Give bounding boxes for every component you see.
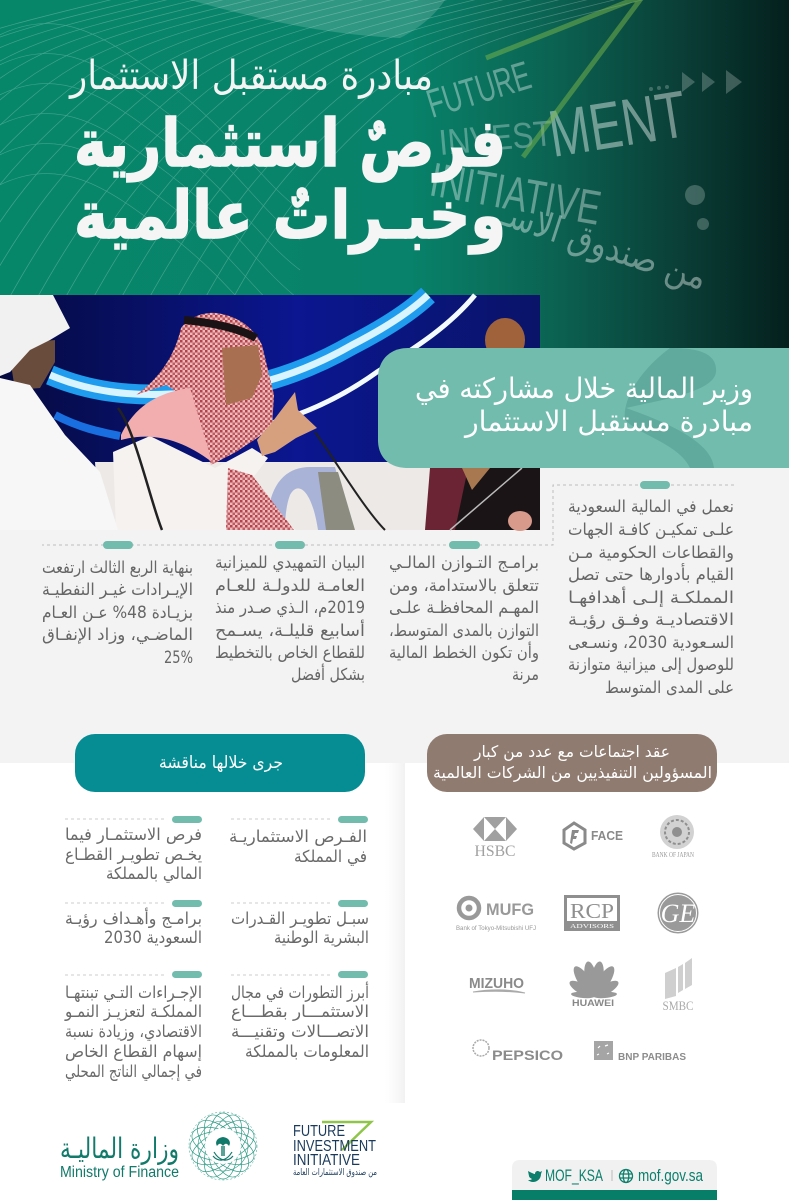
icon: globe xyxy=(620,1170,632,1182)
text columns connector xyxy=(42,485,734,545)
heading: discussion: جرى خلالها مناقشة xyxy=(159,753,283,773)
logo: MUFG xyxy=(456,898,536,932)
panel: column 2: التوازن بالمدى المتوسط، xyxy=(389,621,539,641)
watermark: arrows and nodes xyxy=(649,70,742,230)
panel: column 3: أسابيع قليلـة، يسـمح xyxy=(215,619,365,641)
list item: investment opportunities xyxy=(229,816,368,867)
list item: telecom developments xyxy=(231,971,369,1062)
title: main line 2: وخبـراتٌ عالمية xyxy=(74,177,506,255)
logo: RCP Advisors: RCP xyxy=(570,899,614,923)
photo: minister on stage xyxy=(0,295,540,531)
logo: Huawei xyxy=(567,960,621,1008)
watermark: FII text: MENT xyxy=(544,76,691,171)
microphones xyxy=(118,408,162,530)
logo: Future Investment Initiative xyxy=(293,1122,377,1178)
hero contour lines xyxy=(0,0,662,360)
heading: meetings: المسؤولين التنفيذيين من الشركات العالمية xyxy=(433,763,712,783)
logo: PepsiCo: PEPSICO xyxy=(492,1047,563,1063)
logo: HSBC: HSBC xyxy=(474,843,516,860)
list item: financial sector: المالي بالمملكة xyxy=(106,864,202,884)
list item: growth measures: المملكـة لتعزيـز النمـو xyxy=(64,1002,202,1022)
minister: robe xyxy=(113,436,296,530)
panel: column 2: تتعلق بالاستدامة، ومن xyxy=(389,576,539,596)
list item: financial sector: يخـص تطويـر القطـاع xyxy=(65,845,202,865)
list item: telecom developments: المعلومات بالمملكة xyxy=(245,1042,369,1062)
logo: Bank of Japan: BANK OF JAPAN xyxy=(652,851,694,859)
logo: MUFG: MUFG xyxy=(486,900,534,919)
callout text: وزير المالية خلال مشاركته في xyxy=(415,372,753,405)
logo: GE: GE xyxy=(661,899,695,928)
panel: column 4: الإيـرادات غيـر النفطيـة xyxy=(42,580,193,600)
panel: column 1 xyxy=(568,481,734,698)
panel: column 2: وأن تكون الخطط المالية xyxy=(389,641,539,663)
list item: telecom developments: الاستثمـــار بقطـــاع xyxy=(231,1002,369,1022)
panel: column 1: الاقتصاديـة وفـق رؤيـة xyxy=(568,610,734,630)
list item: growth measures: في إجمالي الناتج المحلي xyxy=(65,1062,202,1082)
list item: financial sector xyxy=(65,816,202,884)
logo: FACE: FACE xyxy=(591,828,623,843)
panel: column 1: السـعودية 2030، ونسـعى xyxy=(568,633,734,653)
watermark: FII text: INVEST xyxy=(437,112,554,163)
panel: hero header xyxy=(0,0,789,360)
panel: column 2: مرنة xyxy=(512,665,539,685)
website: mof.gov.sa xyxy=(638,1166,703,1185)
list item: human capacity: سبـل تطويـر القـدرات xyxy=(231,909,369,929)
minister: headdress xyxy=(136,313,274,465)
icon: ministry emblem xyxy=(187,1110,259,1182)
title: initiative name: مبادرة مستقبل الاستثمار xyxy=(68,53,433,99)
panel: column 3 xyxy=(215,541,365,684)
logo: RCP Advisors: ADVISORS xyxy=(570,924,614,930)
list item: investment opportunities: في المملكة xyxy=(294,847,367,867)
panel: column 3: بشكل أفضل xyxy=(291,663,365,684)
logo: Ministry of Finance wordmark: Ministry of Finance xyxy=(60,1164,179,1181)
watermark: green seven xyxy=(486,0,640,157)
panel: column 1: المملكـة إلـى أهدافهـا xyxy=(568,586,734,608)
watermark: FII text: FUTURE xyxy=(422,54,536,127)
title: main line 1: فرصٌ استثمارية xyxy=(74,105,506,182)
panel: column 3: البيان التمهيدي للميزانية xyxy=(215,553,365,573)
callout: minister caption: مبادرة مستقبل الاستثمار xyxy=(463,405,753,438)
callout: minister caption xyxy=(378,348,789,468)
logo: Ministry of Finance wordmark xyxy=(60,1132,179,1181)
logo: Future Investment Initiative: INVESTMENT xyxy=(293,1138,376,1155)
logo: FACE xyxy=(564,823,623,849)
panel: column 4 xyxy=(42,541,193,667)
panel: column 4: 25% xyxy=(164,648,193,667)
panel: column 2: برامـج التـوازن المالـي xyxy=(389,553,539,573)
marker xyxy=(640,481,670,489)
stage light arcs xyxy=(50,295,428,394)
grey text band xyxy=(0,468,789,763)
light swoosh xyxy=(190,0,445,38)
panel: column 4: بزيـادة 48% عـن العـام xyxy=(42,603,193,623)
list item: telecom developments: الاتصـــالات وتقنيـــة xyxy=(231,1022,369,1042)
marker xyxy=(449,541,480,549)
logo: GE xyxy=(658,892,698,934)
panel: column 3: 2019م، الـذي صـدر منذ xyxy=(215,598,365,618)
logo: BNP Paribas: BNP PARIBAS xyxy=(618,1052,686,1063)
panel: column 1: والقطاعات الحكومية مـن xyxy=(568,543,734,563)
logo: Future Investment Initiative: من صندوق الاستثمارات العامة xyxy=(293,1168,377,1178)
callout watermark shape xyxy=(625,348,716,468)
woman on right xyxy=(485,318,525,362)
minister: raised hand xyxy=(257,392,317,456)
panel: column 4: بنهاية الربع الثالث ارتفعت xyxy=(42,558,193,578)
handle: MOF_KSA xyxy=(545,1166,603,1185)
panel: column 1: للوصول إلى ميزانية متوازنة xyxy=(568,655,734,675)
list item: financial sector: فرص الاستثمـار فيما xyxy=(65,825,202,845)
logo: Huawei: HUAWEI xyxy=(572,998,614,1008)
watermark: FII text xyxy=(422,54,691,236)
list item: investment opportunities: الفـرص الاستثماريـة xyxy=(229,827,367,847)
marker xyxy=(275,541,305,549)
panel: column 3: العامـة للدولـة للعـام xyxy=(215,576,365,596)
podium arch xyxy=(267,467,352,530)
list item: human capacity xyxy=(231,900,369,948)
logo: HSBC xyxy=(473,817,517,860)
left man: gutra and face xyxy=(8,340,55,390)
left man: robe xyxy=(0,378,118,530)
minister: igal xyxy=(184,320,256,338)
list item: growth measures: إسهام القطاع الخاص xyxy=(65,1042,202,1062)
logo: SMBC: SMBC xyxy=(662,998,694,1013)
logo: RCP Advisors xyxy=(564,895,620,931)
panel: column 4: الماضـي، وزاد الإنفـاق xyxy=(42,625,193,645)
logo: PepsiCo xyxy=(473,1040,563,1063)
list item: vision 2030: السعودية 2030 xyxy=(104,928,202,948)
panel: column 1: نعمل في المالية السعودية xyxy=(568,497,734,517)
vertical panel shadow xyxy=(385,763,405,1103)
panel: column 2: المهـم المحافظـة علـى xyxy=(389,598,539,618)
panel: column 1: القيام بأدوارها حتى تصل xyxy=(568,563,734,585)
watermark: FII text: INITIATIVE xyxy=(426,154,605,236)
list item: telecom developments: أبرز التطورات في مجال xyxy=(231,981,369,1003)
list item: growth measures: الإجـراءات التـي تبنتهـا xyxy=(65,983,202,1003)
panel: column 3: للقطاع الخاص بالتخطيط xyxy=(215,643,365,663)
minister: pink stripe xyxy=(121,388,212,462)
logo: BNP Paribas xyxy=(594,1041,686,1063)
logo: Future Investment Initiative: FUTURE xyxy=(293,1123,345,1140)
list item: human capacity: البشرية الوطنية xyxy=(274,928,369,948)
list item: vision 2030: برامـج وأهـداف رؤيـة xyxy=(65,907,202,929)
sofa xyxy=(95,462,540,530)
panel: column 1: علـى تمكيـن كافـة الجهات xyxy=(568,520,734,540)
minister: lower headdress band xyxy=(226,468,294,530)
panel: column 2 xyxy=(389,541,539,685)
social bar xyxy=(512,1160,717,1200)
heading: discussion xyxy=(75,734,365,792)
heading: meetings xyxy=(427,734,717,792)
logo: Future Investment Initiative: INITIATIVE xyxy=(293,1152,360,1169)
logo: MUFG: Bank of Tokyo-Mitsubishi UFJ xyxy=(456,925,536,932)
logo: Mizuho: MIZUHO xyxy=(469,975,524,992)
minister: face xyxy=(222,345,262,405)
list item: growth measures xyxy=(64,971,202,1082)
panel: column 1: على المدى المتوسط xyxy=(605,678,734,698)
marker xyxy=(103,541,133,549)
logo: Bank of Japan xyxy=(652,815,694,859)
heading: meetings: عقد اجتماعات مع عدد من كبار xyxy=(473,742,670,762)
logo: SMBC xyxy=(662,958,694,1013)
list item: growth measures: الاقتصادي، وزيادة نسبة xyxy=(65,1022,202,1042)
list item: vision 2030 xyxy=(65,900,202,948)
watermark: arabic fund text: من صندوق الاسـ xyxy=(494,193,712,299)
icon: twitter bird xyxy=(528,1171,542,1182)
logo: Ministry of Finance wordmark: وزارة الماليـة xyxy=(60,1132,179,1165)
